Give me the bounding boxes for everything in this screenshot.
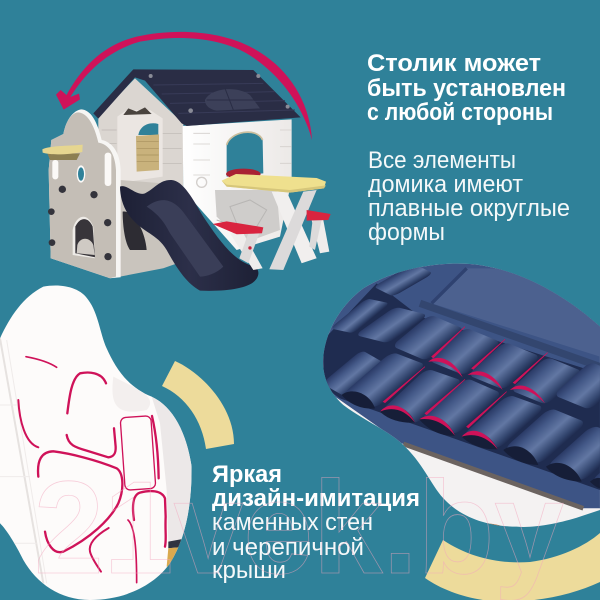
tile end caps: [342, 391, 600, 490]
heading: table placement: быть установлен: [367, 75, 566, 102]
text: stone walls and tile roof: и черепичной: [212, 534, 364, 561]
side wall: [98, 78, 183, 193]
yellow arc: lower right decor: [425, 533, 600, 600]
text: rounded forms: формы: [368, 219, 445, 246]
text: rounded forms: [368, 147, 570, 246]
text: rounded forms: домика имеют: [368, 171, 523, 198]
crimson stone outlines: [18, 357, 166, 583]
heading: table placement: [367, 50, 566, 126]
play house illustration: [42, 69, 331, 291]
text: rounded forms: Все элементы: [368, 147, 516, 174]
stool back: [307, 210, 331, 253]
roof: [93, 69, 301, 126]
heading: imitation design: дизайн-имитация: [212, 485, 420, 512]
photo blob: roof tiles: [320, 260, 600, 533]
slide: [120, 180, 258, 291]
curved arrow: table can move: [56, 32, 312, 140]
tile rows: [326, 267, 600, 480]
text: stone walls and tile roof: каменных стен: [212, 509, 373, 536]
photo blob: stone wall: [0, 283, 200, 600]
watermark: 21vek.by: [34, 454, 564, 600]
heading: imitation design: Яркая: [212, 461, 282, 488]
yellow arc: lower left decor: [162, 361, 234, 449]
side door opening: [117, 107, 163, 183]
heading: imitation design: [212, 461, 420, 512]
text: stone walls and tile roof: [212, 509, 373, 584]
hoop: [42, 145, 83, 160]
gaps between tiles: [323, 283, 600, 490]
text: stone walls and tile roof: крыши: [212, 557, 286, 584]
crimson tile highlights: [380, 327, 548, 449]
heading: table placement: Столик может: [367, 50, 541, 77]
climbing panel: [48, 109, 121, 278]
table with yellow top: [222, 174, 326, 270]
bridge under slide: [120, 180, 187, 277]
heading: table placement: с любой стороны: [367, 99, 553, 126]
front wall: [183, 119, 292, 250]
text: rounded forms: плавные округлые: [368, 195, 570, 222]
stool front: [213, 221, 263, 270]
